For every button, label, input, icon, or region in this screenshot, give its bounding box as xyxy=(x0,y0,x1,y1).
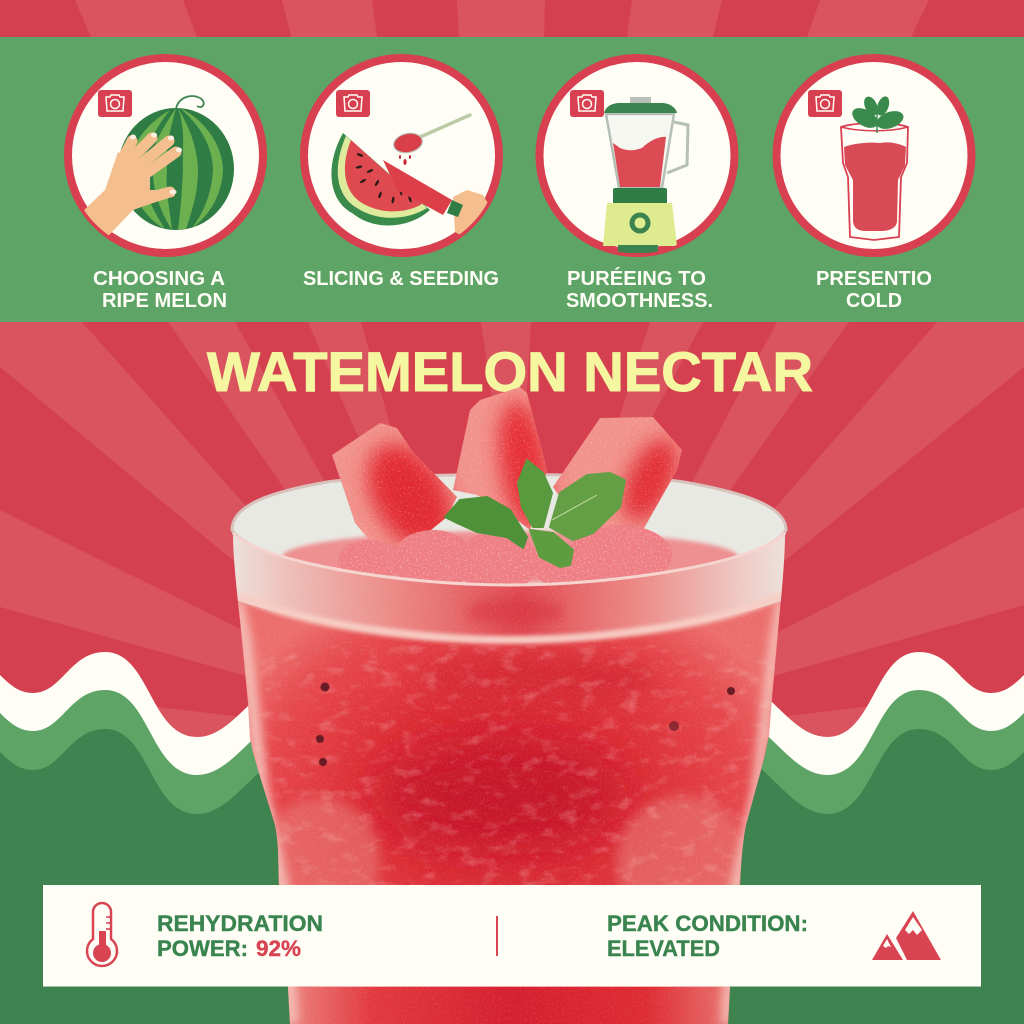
icon: mint sprig xyxy=(849,94,906,133)
label: presentio cold xyxy=(816,268,932,312)
icon: spoon xyxy=(392,115,470,165)
icon: hand xyxy=(84,132,182,236)
label: pureeing to smoothness: SMOOTHNESS. xyxy=(566,290,713,312)
step 1: choosing a ripe melon xyxy=(68,58,263,312)
icon: thermometer xyxy=(87,903,117,966)
label: pureeing to smoothness: PURÉEING TO xyxy=(567,267,706,290)
icon: mountains xyxy=(872,911,941,960)
step 1 circle xyxy=(68,58,263,253)
glass body with juice xyxy=(225,525,795,1024)
stat: peak condition: PEAK CONDITION: xyxy=(607,911,808,936)
stat: rehydration power: 92% xyxy=(256,936,301,961)
label: choosing a ripe melon xyxy=(93,268,227,312)
stats panel xyxy=(43,885,981,986)
icon: camera badge xyxy=(808,90,842,117)
icon: watermelon xyxy=(118,96,234,230)
label: presentio cold: PRESENTIO xyxy=(816,268,932,290)
divider xyxy=(496,916,498,956)
stat: rehydration power: REHYDRATION xyxy=(157,911,323,936)
stat: rehydration power xyxy=(157,911,323,961)
label: choosing a ripe melon: RIPE MELON xyxy=(102,290,227,312)
watermelon seeds in juice xyxy=(316,682,735,766)
slush scoops xyxy=(338,525,672,584)
top strip with red rays xyxy=(0,0,1024,38)
step 3 circle xyxy=(540,58,734,253)
step 2 circle xyxy=(304,58,499,253)
label: choosing a ripe melon: CHOOSING A xyxy=(93,268,225,290)
mint leaves xyxy=(445,460,625,567)
label: slicing and seeding: SLICING & SEEDING xyxy=(303,268,499,290)
icon: knife and hand xyxy=(383,160,488,234)
stat: peak condition: ELEVATED xyxy=(607,936,720,961)
label: presentio cold: COLD xyxy=(846,290,902,312)
label: pureeing to smoothness xyxy=(566,267,713,312)
step 4: presenting cold xyxy=(776,58,972,312)
icon: blender xyxy=(603,97,688,253)
waves: cream, light green, dark green xyxy=(0,652,1024,1024)
stat: rehydration power: POWER: xyxy=(157,936,248,961)
step 3: pureeing xyxy=(540,58,734,312)
hero glass of watermelon nectar xyxy=(225,380,795,1024)
icon: camera badge xyxy=(570,90,604,117)
green process band xyxy=(0,37,1024,322)
title: WATEMELON NECTAR xyxy=(207,340,813,403)
icon: camera badge xyxy=(336,90,370,117)
stat: peak condition xyxy=(607,911,808,961)
watermelon cubes xyxy=(332,387,682,548)
background: main red sunburst xyxy=(0,322,1024,1024)
icon: watermelon slice xyxy=(331,133,430,225)
icon: camera badge xyxy=(98,90,132,117)
glass back rim xyxy=(232,474,786,590)
icon: glass of juice xyxy=(841,123,908,240)
step 4 circle xyxy=(776,58,972,253)
step 2: slicing and seeding xyxy=(303,58,499,290)
